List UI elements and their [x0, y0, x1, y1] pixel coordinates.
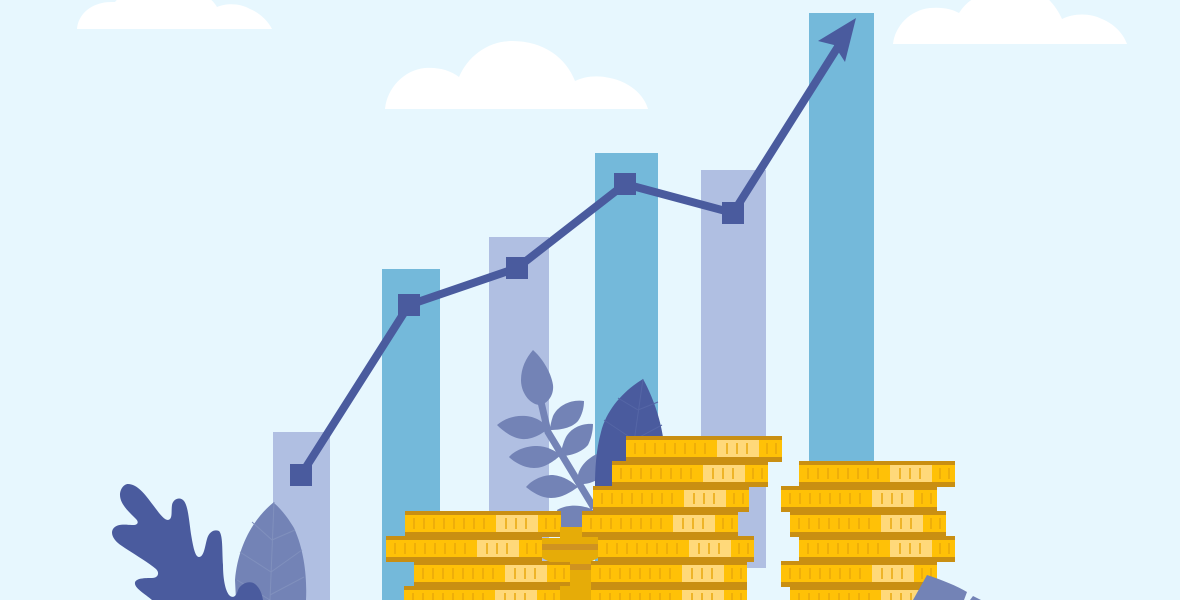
bar 5 — [701, 170, 766, 568]
bar 3 — [489, 237, 549, 600]
data point 2 — [398, 294, 420, 316]
bar 4 — [595, 153, 658, 600]
stacked coins: middle — [582, 436, 782, 600]
oak leaf: left — [112, 484, 263, 600]
pale leaf: bottom center left — [235, 502, 306, 600]
arrow head — [818, 18, 856, 62]
large dark leaf — [595, 379, 664, 486]
data point 3 — [506, 257, 528, 279]
cloud: top right — [893, 0, 1127, 44]
data point 5 — [722, 202, 744, 224]
stacked coins: left — [386, 511, 570, 600]
cloud: center — [385, 41, 648, 109]
plant: branch with leaves — [497, 350, 602, 527]
stacked coins: right — [781, 461, 955, 600]
data point 4 — [614, 173, 636, 195]
data point 1 — [290, 464, 312, 486]
leaf tip sliver — [970, 596, 981, 600]
center standing coin — [542, 527, 598, 600]
bar 6 — [809, 13, 874, 463]
cloud: top left — [77, 0, 272, 29]
bar 2 — [382, 269, 440, 600]
trend line with arrow — [290, 18, 856, 486]
leaf tip: bottom right — [913, 575, 967, 600]
bar 1 — [273, 432, 330, 600]
